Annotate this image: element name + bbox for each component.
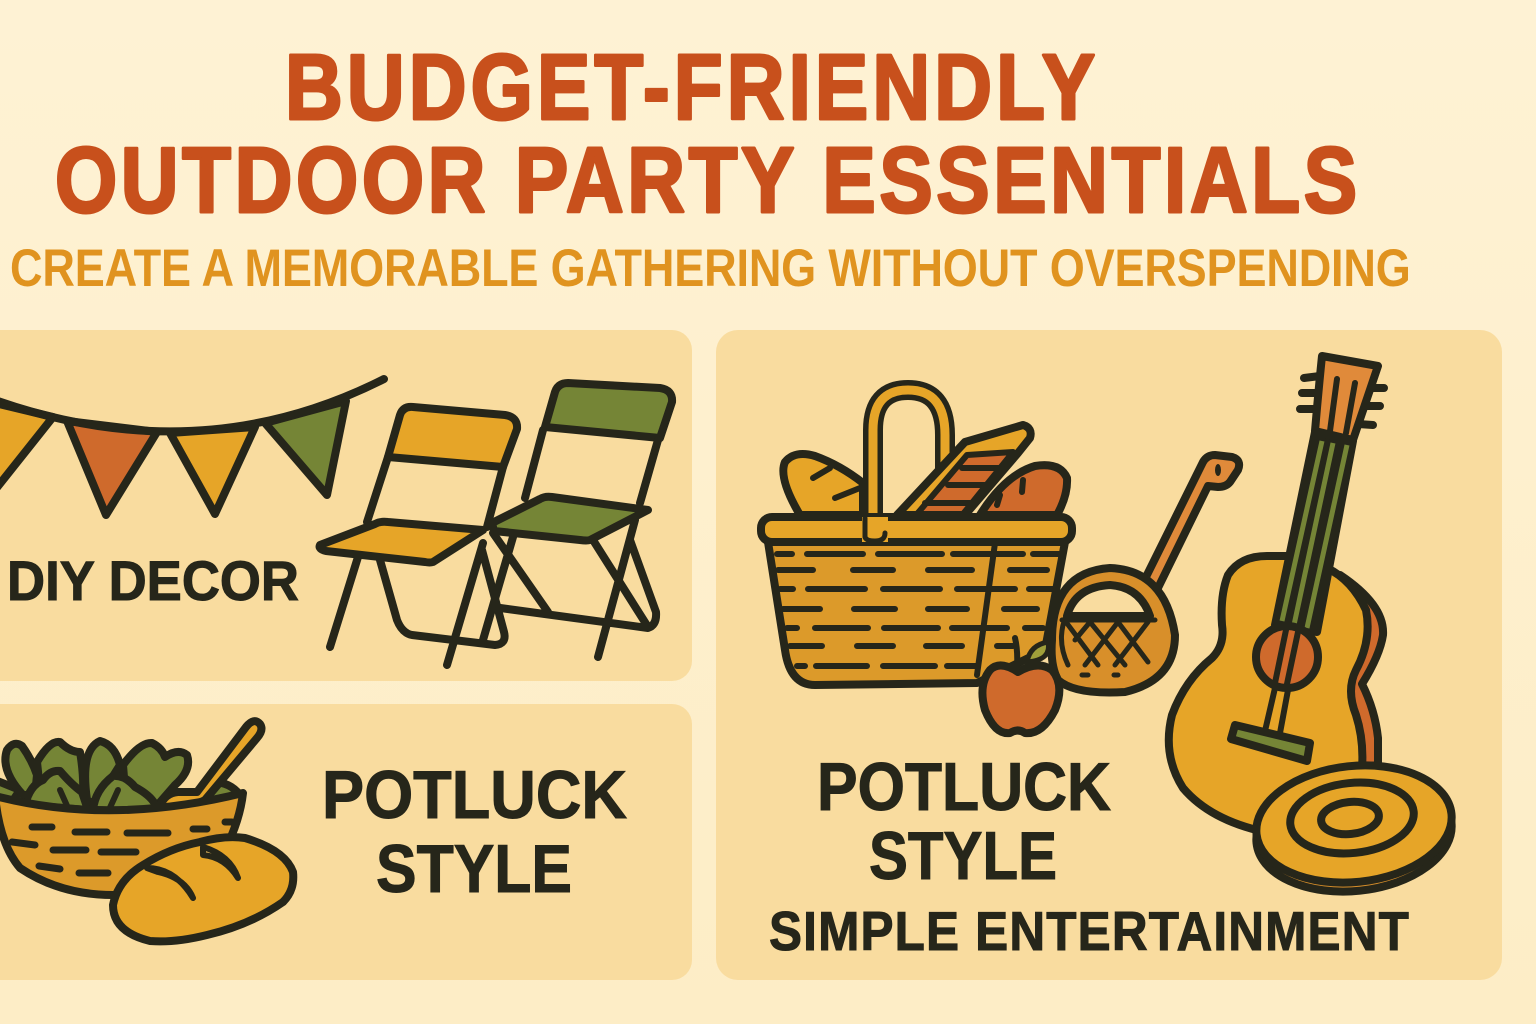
title: BUDGET-FRIENDLY (285, 35, 1095, 139)
icon: yellow folding chair (320, 407, 517, 665)
panel: picnic and entertainment (716, 330, 1502, 980)
label: potluck style right: STYLE (869, 818, 1057, 894)
icon: guitar (1169, 356, 1384, 832)
icon: frisbee (1250, 756, 1458, 901)
icon: apple (982, 638, 1059, 733)
panel: DIY decor (0, 330, 692, 681)
icon: bunting (0, 379, 384, 515)
label: potluck style: POTLUCK (322, 757, 627, 833)
label: potluck style (322, 757, 627, 907)
label: potluck style: STYLE (376, 831, 572, 907)
icon: small basket with handle (1052, 455, 1239, 692)
label: simple entertainment: SIMPLE ENTERTAINMENT (769, 902, 1409, 963)
subtitle: CREATE A MEMORABLE GATHERING WITHOUT OVERSPENDING (10, 239, 1411, 298)
title (55, 35, 1357, 232)
icon: green folding chair (483, 383, 672, 657)
label: potluck style right (817, 749, 1111, 894)
label: potluck style right: POTLUCK (817, 749, 1111, 825)
title: OUTDOOR PARTY ESSENTIALS (55, 128, 1357, 232)
icon: bread loaf (113, 837, 293, 941)
icon: picnic basket (761, 390, 1072, 685)
label: DIY decor: DIY DECOR (7, 549, 299, 612)
panel: potluck style left (0, 704, 692, 980)
icon: salad bowl (0, 721, 261, 895)
